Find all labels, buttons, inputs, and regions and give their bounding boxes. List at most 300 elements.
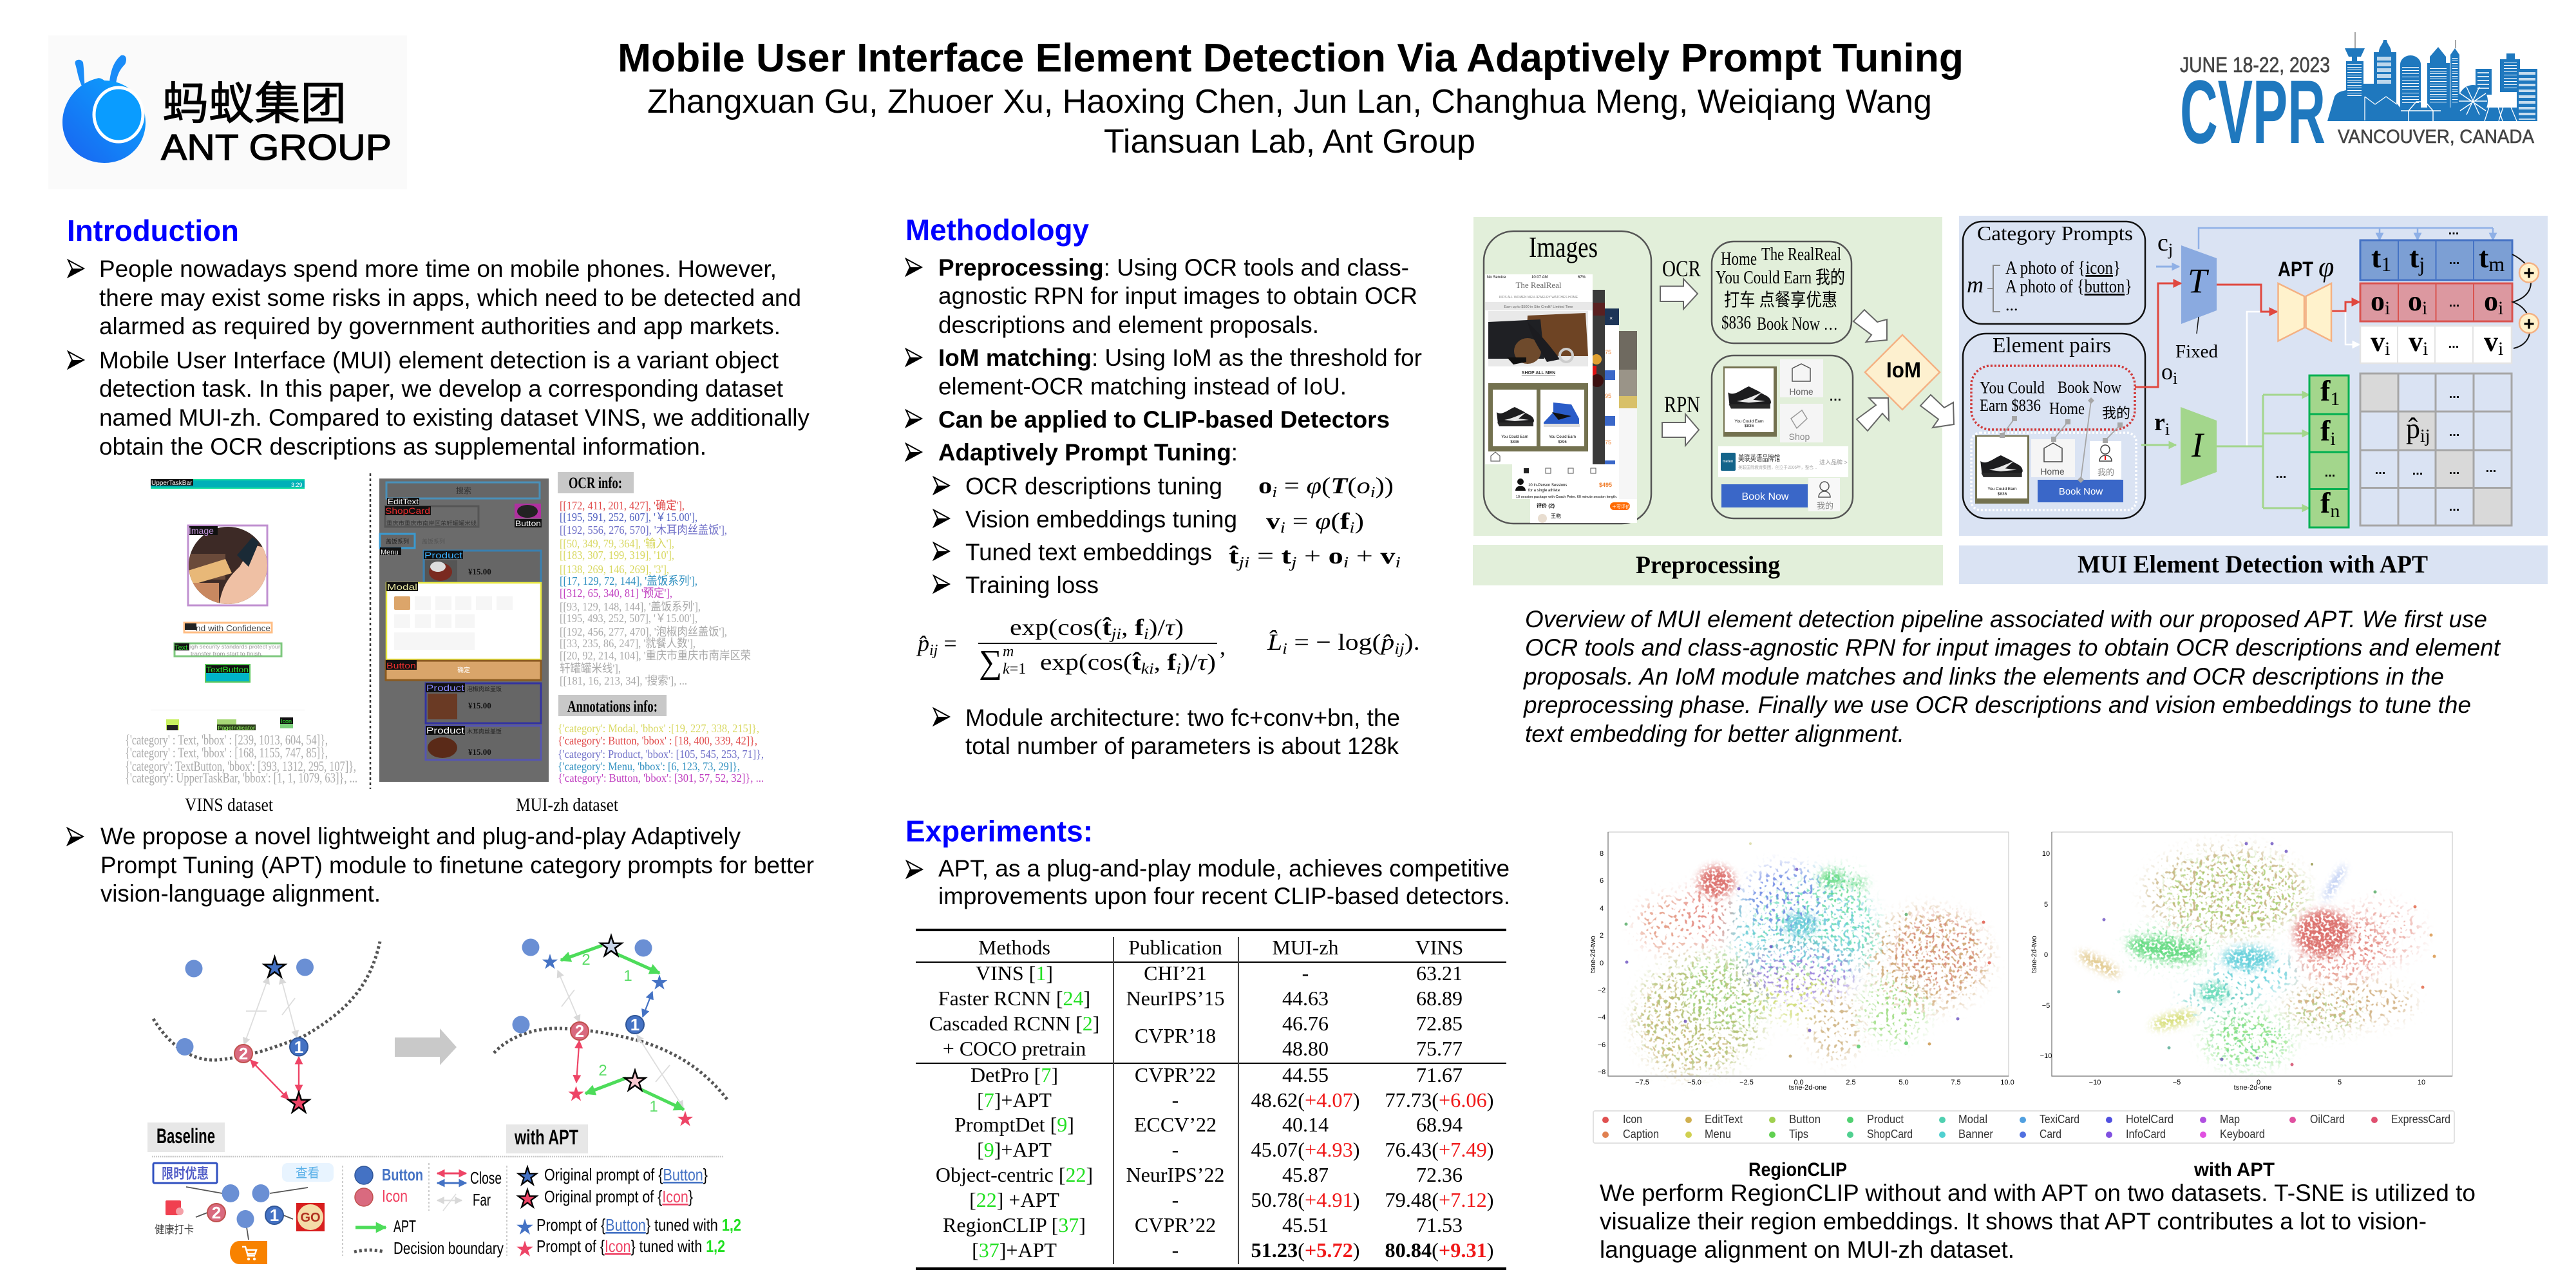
label: with APT: [506, 1124, 588, 1153]
arrow: OCR: OCR: [1662, 256, 1701, 281]
legend: t-SNE categories: InfoCard: [2126, 1128, 2166, 1141]
Annotations info list: {'category': Button, 'bbox': [301, 57, 52, 32]}, ...: [558, 772, 764, 784]
table header: Publication: [1128, 936, 1222, 959]
MUI-zh annotated screenshot: ¥15.00: [468, 701, 491, 710]
MUI-zh annotated screenshot: Button: [386, 661, 416, 670]
vision embedding table: v: [2409, 326, 2423, 357]
element pairs box: 我的: [2098, 468, 2114, 477]
formula: loss: ki: [1141, 661, 1154, 677]
formula: loss: [916, 614, 1420, 681]
text block: t-SNE explanation: [1600, 1180, 2476, 1263]
axis ticks: −2: [1598, 987, 1605, 994]
text block: t-SNE explanation: language alignment on MUI-zh dataset.: [1600, 1236, 2014, 1263]
images stack: 王艳: [1551, 513, 1561, 519]
chart: t-SNE RegionCLIP: [1589, 832, 2014, 1092]
text encoder T: T: [2188, 261, 2210, 300]
axis ticks: 10: [2418, 1079, 2425, 1086]
OCR info list: [[20, 92, 214, 104], '重庆市重庆市南岸区荣: [560, 649, 751, 662]
category prompts box: A photo of {icon}: [2005, 258, 2121, 278]
category prompts box: [1963, 222, 2145, 324]
axis ticks: −5: [2042, 1002, 2050, 1010]
text block: intro bullet 1: People nowadays spend more time on mobile phones. However,: [99, 256, 777, 282]
APT module: APT: [2278, 258, 2313, 281]
figure: with APT decision boundary: 2: [575, 1021, 584, 1041]
images stack: You Could Earn: [1549, 435, 1576, 439]
element pairs box: 我的: [2102, 405, 2130, 421]
region features column: [2309, 374, 2349, 527]
text block: intro bullet 2: [68, 347, 810, 460]
images stack: 75: [1605, 439, 1611, 446]
chart: t-SNE with APT: [2031, 832, 2452, 1092]
images stack: KIDS ALL WOMEN MEN JEWELRY WATCHES HOME: [1499, 296, 1578, 299]
row: VINS: 63.21: [1416, 961, 1463, 985]
legend: t-SNE categories: Modal: [1958, 1113, 1987, 1126]
vision embedding table: i: [2385, 338, 2390, 359]
sub bullet: tuned text embeddings: +: [1297, 543, 1329, 569]
formula: loss: ji: [1109, 626, 1121, 643]
formula: loss: τ): [1197, 649, 1215, 675]
row: Cascaded RCNN: [929, 1012, 1463, 1047]
sub bullet: module architecture: Module architecture: two fc+conv+bn, the: [965, 705, 1400, 731]
sub bullet: tuned text embeddings: Tuned text embeddings: [965, 539, 1212, 565]
row: Object-centric: NeurIPS’22: [1126, 1163, 1224, 1186]
axis ticks: tsne-2d-one: [1789, 1084, 1826, 1092]
text embedding table: 1: [2381, 252, 2391, 276]
row: COCO pretrain: 48.80: [1282, 1037, 1329, 1060]
example UI elements mapped to points: 2: [212, 1203, 221, 1222]
row: RegionCLIP: 71.53: [1416, 1213, 1463, 1236]
figure: with APT decision boundary: 1: [649, 1098, 658, 1115]
Annotations info list: {'category': Button, 'bbox' : [18, 400, 339, 42]},: [558, 734, 757, 747]
formula: loss: =: [938, 630, 957, 656]
legend: APT figure: Far: [473, 1190, 491, 1209]
images stack: ×: [1609, 315, 1613, 321]
legend: APT figure: Close: [470, 1168, 502, 1188]
row: PromptDet APT: -: [1172, 1138, 1179, 1161]
arrow: RPN: RPN: [1664, 392, 1700, 417]
Annotations info heading: [558, 695, 667, 716]
sub bullet: tuned text embeddings: t̂: [1229, 543, 1239, 569]
APT module: [2278, 251, 2334, 341]
sub bullet: vision tuning: φ(f: [1315, 508, 1348, 534]
axis ticks: 7.5: [1951, 1079, 1961, 1086]
row: VINS: [976, 961, 1463, 985]
OCR info heading: OCR info:: [569, 475, 622, 492]
axis ticks: −5.0: [1687, 1079, 1701, 1086]
row: RegionCLIP APT: -: [1172, 1238, 1179, 1262]
APT module: φ: [2318, 251, 2334, 283]
title block: Tiansuan Lab, Ant Group: [1104, 123, 1475, 160]
logo: CVPR 2023 Vancouver: CVPR: [2180, 61, 2325, 162]
MUI-zh annotated screenshot: Menu: [381, 549, 399, 556]
sub bullet: vision tuning: =: [1285, 508, 1315, 534]
row: DetPro: 44.55: [1282, 1063, 1329, 1086]
VINS screenshot with boxes: PageIndicator: [218, 725, 255, 731]
images stack: No Service: [1487, 276, 1506, 279]
row: PromptDet: PromptDet [9]: [954, 1113, 1074, 1136]
MUI-zh annotated screenshot: [379, 478, 549, 782]
axis ticks: 10.0: [2000, 1079, 2014, 1086]
RPN element proposals box: 进入品牌 >: [1819, 459, 1848, 466]
images stack: The RealReal: [1515, 280, 1562, 290]
row: Object-centric: [936, 1163, 1463, 1186]
OCR embedding table: ...: [2449, 296, 2459, 310]
row: PromptDet: 40.14: [1282, 1113, 1329, 1136]
images stack: 10:07 AM: [1531, 276, 1548, 279]
figure: with APT decision boundary: 1: [623, 967, 632, 985]
OCR info list: [[172, 411, 201, 427], '确定'],: [560, 499, 685, 512]
row: PromptDet: [954, 1113, 1463, 1136]
arrow: baseline to APT: [395, 1028, 457, 1065]
region features column: n: [2330, 500, 2340, 522]
text embedding table: m: [2488, 252, 2505, 276]
element pairs box: Book Now: [2059, 486, 2103, 497]
sub bullet: tuned text embeddings: i: [1343, 554, 1349, 571]
plus nodes: [2512, 254, 2539, 348]
formula: loss: ,: [1121, 614, 1135, 640]
VINS screenshot with boxes: transfer from start to finish.: [191, 651, 263, 657]
table header: VINS: [1416, 936, 1463, 959]
vision embedding table: i: [2498, 338, 2503, 359]
MUI-zh annotated screenshot: 搜索: [456, 486, 471, 495]
OCR embedding table: i: [2498, 298, 2503, 319]
probability matrix: ...: [2412, 464, 2423, 478]
axis ticks: 0: [2044, 951, 2048, 959]
row: VINS: VINS [1]: [976, 961, 1053, 985]
text block: intro bullet 3: vision-language alignment.: [100, 880, 381, 907]
sub bullet: tuned text embeddings: i: [1395, 554, 1401, 571]
label: Preprocessing: Preprocessing: [1636, 551, 1780, 579]
row: VINS: -: [1302, 961, 1309, 985]
input labels and arrows: i: [2173, 369, 2177, 388]
bullet: Preprocessing: agnostic RPN for input images to obtain OCR: [938, 283, 1417, 309]
title block: [618, 36, 1964, 160]
OCR info list: [[181, 16, 213, 34], '搜索'], ...: [560, 674, 687, 687]
OCR info list: [[195, 493, 252, 507], '￥15.00'],: [560, 612, 697, 625]
formula: loss: m: [1003, 643, 1014, 660]
probability matrix: ...: [2449, 425, 2459, 439]
images stack: 10 In-Person Sessions: [1528, 484, 1567, 488]
OCR info list: 轩罐罐米线'],: [560, 662, 621, 675]
panel: preprocessing pipeline: [1473, 217, 1954, 536]
bullet: Adaptively Prompt Tuning: Adaptively Prompt Tuning:: [938, 439, 1238, 466]
caption: MUI-zh dataset: MUI-zh dataset: [516, 795, 618, 815]
axis ticks: −5: [2173, 1079, 2181, 1086]
element pairs box: Home: [2040, 466, 2065, 477]
legend: t-SNE categories: HotelCard: [2126, 1113, 2174, 1126]
formula: loss: ij: [929, 642, 938, 659]
Annotations info list: [558, 722, 764, 784]
region features column: 1: [2330, 388, 2340, 410]
OCR info list: [[50, 349, 79, 364], '输入'],: [560, 537, 674, 550]
images stack: You Could Earn: [1501, 435, 1528, 439]
vision embedding table: v: [2371, 326, 2385, 357]
sub bullet: tuned text embeddings: v: [1380, 543, 1395, 569]
row: RegionCLIP: RegionCLIP [37]: [943, 1213, 1086, 1236]
element pairs box: Element pairs: [1993, 334, 2111, 357]
images stack: 评价 (2): [1537, 502, 1555, 509]
bullet: APT plug-and-play: APT, as a plug-and-play module, achieves competitive: [938, 855, 1510, 882]
figure: baseline decision boundary: 2: [239, 1044, 248, 1063]
probability matrix: ...: [2449, 463, 2459, 477]
images stack: 75: [1605, 349, 1611, 355]
Annotations info list: {'category': Menu, 'bbox': [6, 123, 73, 29]},: [558, 760, 740, 773]
row: RegionCLIP: [943, 1213, 1463, 1236]
probability matrix: ...: [2375, 463, 2385, 477]
row: Faster RCNN: [938, 987, 1463, 1010]
pipeline caption: [1523, 606, 2501, 747]
example UI elements mapped to points: 限时优惠: [162, 1166, 209, 1182]
formula: loss: = − log(: [1287, 629, 1381, 655]
axis ticks: −4: [1598, 1014, 1605, 1021]
arrow: OCR to IoM: [1853, 310, 1887, 342]
formula: loss: ∑: [979, 644, 1002, 681]
axis ticks: 10: [2042, 850, 2050, 858]
row: Object-centric APT: -: [1172, 1188, 1179, 1211]
label: Baseline: [147, 1122, 225, 1152]
axis ticks: [1589, 850, 2014, 1092]
region features column: i: [2330, 428, 2336, 450]
figure: with APT decision boundary: 1: [630, 1015, 639, 1034]
input labels and arrows: c: [2157, 229, 2168, 256]
vision embedding table: [2360, 326, 2512, 363]
images stack: for a single athlete: [1528, 489, 1560, 493]
sub bullet: tuned text embeddings: t: [1282, 543, 1291, 569]
label: MUI Element Detection with APT: MUI Element Detection with APT: [2078, 551, 2428, 578]
row: COCO pretrain: [943, 1037, 1463, 1060]
MUI-zh annotated screenshot: 盖饭系列: [422, 538, 445, 545]
input labels and arrows: r: [2154, 409, 2165, 436]
sub bullet: tuned text embeddings: ji: [1236, 554, 1249, 571]
pipeline caption: preprocessing phase. Finally we use OCR descriptions and vision embeddings to tune the: [1523, 692, 2471, 718]
MUI-zh annotated screenshot: EditText: [388, 497, 419, 506]
Annotations info list: {'category': Product, 'bbox': [105, 545, 253, 71]},: [558, 748, 764, 761]
sub bullet: tuned text embeddings: o: [1329, 543, 1343, 569]
logo: Ant Group: 蚂蚁集团: [162, 79, 346, 129]
element pairs box: Home: [2049, 399, 2085, 418]
label: MUI Element Detection with APT: [1959, 545, 2548, 584]
row: RegionCLIP APT: 80.84(+9.31): [1385, 1238, 1494, 1262]
element pairs box: Book Now: [2058, 378, 2121, 397]
legend: t-SNE categories: Caption: [1623, 1128, 1659, 1141]
panel: experiments: [905, 814, 1510, 1270]
legend: t-SNE categories: ExpressCard: [2391, 1113, 2450, 1126]
sub bullet: vision tuning: Vision embeddings tuning: [965, 506, 1237, 533]
legend: APT figure: Button: [382, 1165, 423, 1184]
images stack: ＋写评价: [1612, 504, 1630, 509]
row: PromptDet: ECCV’22: [1134, 1113, 1217, 1136]
heading: Introduction: Introduction: [67, 214, 239, 247]
probability matrix: [2360, 374, 2512, 526]
row: Faster RCNN: Faster RCNN [24]: [938, 987, 1090, 1010]
VINS screenshot with boxes: Icon: [281, 718, 292, 724]
OCR info list: [560, 499, 751, 687]
element pairs box: [1963, 334, 2145, 518]
row: DetPro: [971, 1063, 1463, 1086]
formula: loss: ,: [1220, 634, 1226, 659]
VINS screenshot with boxes: Image: [189, 526, 214, 536]
OCR embedding table: o: [2484, 285, 2498, 317]
row: Object-centric APT: 50.78(+4.91): [1251, 1188, 1360, 1211]
sub bullet: module architecture: total number of parameters is about 128k: [965, 733, 1399, 759]
OCR results box: You Could Earn 我的: [1716, 267, 1845, 288]
RPN element proposals box: Home: [1789, 386, 1814, 397]
MUI-zh annotated screenshot: 确定: [457, 666, 470, 674]
text block: intro bullet 3: We propose a novel lightweight and plug-and-play Adaptively: [100, 823, 741, 849]
row: RegionCLIP APT: 51.23(+5.72): [1251, 1238, 1360, 1262]
formula: loss: ,: [1154, 649, 1167, 675]
example UI elements mapped to points: [153, 1163, 334, 1264]
images stack: 10 session package with Coach Peter. 60 minute session length.: [1516, 495, 1618, 499]
images stack: [1484, 231, 1651, 524]
axis ticks: [2031, 850, 2425, 1092]
category prompts box: ...: [2005, 296, 2018, 314]
OCR embedding table: i: [2385, 298, 2390, 319]
input labels and arrows: o: [2161, 359, 2173, 384]
region features column: ...: [2325, 466, 2335, 480]
VINS annotation text: {'category' : Text, 'bbox' : [239, 1013, 604, 54]},: [125, 732, 328, 748]
VINS annotation text: {'category': UpperTaskBar, 'bbox': [1, 1, 1079, 63]}, ...: [125, 770, 357, 786]
formula: loss: i: [1282, 641, 1287, 658]
figure: baseline decision boundary: [153, 942, 380, 1112]
probability matrix: p̂: [2406, 413, 2420, 444]
row: DetPro: 71.67: [1416, 1063, 1463, 1086]
bullet: Preprocessing: [906, 254, 1417, 338]
sub bullet: OCR tuning: i: [1272, 484, 1277, 501]
OCR info heading: [558, 472, 634, 493]
OCR info list: [[33, 235, 86, 247], '就餐人数'],: [560, 637, 696, 650]
OCR results box: The RealReal: [1761, 245, 1841, 265]
row: Object-centric: 45.87: [1282, 1163, 1329, 1186]
category prompts box: Category Prompts: [1977, 222, 2133, 245]
IoM diamond: IoM: [1886, 358, 1921, 383]
legend: t-SNE categories: TexiCard: [2040, 1113, 2079, 1126]
logo: Ant Group: ANT GROUP: [161, 127, 392, 168]
images stack: $836: [1510, 440, 1519, 444]
table header: MUI-zh: [1272, 936, 1339, 959]
VINS annotation text: [125, 732, 357, 786]
legend: APT figure: Icon: [382, 1186, 408, 1206]
text encoder T: Fixed: [2175, 342, 2218, 362]
text encoder T: [2175, 245, 2218, 362]
VINS screenshot with boxes: UpperTaskBar: [151, 480, 193, 487]
axis ticks: −6: [1598, 1041, 1605, 1049]
images stack: 67%: [1578, 276, 1586, 279]
formula: loss: p̂: [1379, 629, 1394, 655]
legend: APT figure: Prompt of {Icon} tuned with 1,2: [536, 1236, 725, 1256]
text embedding table: t: [2479, 241, 2488, 274]
figure: with APT decision boundary: [494, 936, 727, 1126]
formula: loss: f: [1135, 614, 1144, 640]
legend: t-SNE categories: OilCard: [2310, 1113, 2345, 1126]
figure: with APT decision boundary: 2: [582, 951, 591, 969]
row: PromptDet APT: 45.07(+4.93): [1251, 1138, 1360, 1161]
row: Object-centric APT: [22] +APT: [969, 1188, 1059, 1211]
formula: loss: p̂: [916, 630, 929, 656]
VINS screenshot with boxes: igh security standards protect your: [190, 644, 280, 650]
heading: Experiments: Experiments:: [905, 814, 1093, 848]
heading: Methodology: Methodology: [905, 213, 1089, 247]
OCR info list: [[138, 269, 146, 269], '3'],: [560, 563, 669, 576]
pipeline caption: OCR tools and class-agnostic RPN for input images to obtain OCR descriptions and element: [1525, 634, 2501, 661]
VINS screenshot with boxes: 3:29: [291, 482, 303, 488]
formula: loss: ).: [1405, 629, 1420, 655]
logo: CVPR 2023 Vancouver: [2180, 32, 2537, 162]
row: Cascaded RCNN: Cascaded RCNN [2]: [929, 1012, 1099, 1035]
images stack: $396: [1558, 440, 1567, 444]
row: RegionCLIP: CVPR’22: [1135, 1213, 1216, 1236]
VINS annotation text: {'category': TextButton, 'bbox': [393, 1312, 295, 107]},: [125, 758, 356, 774]
row: DetPro APT: [7]+APT: [977, 1088, 1052, 1112]
row: DetPro APT: 77.73(+6.06): [1385, 1088, 1494, 1112]
sub bullet: OCR tuning: )): [1376, 473, 1394, 498]
MUI-zh annotated screenshot: ¥15.00: [468, 747, 491, 757]
category prompts box: m: [1967, 272, 1984, 298]
pipeline caption: Overview of MUI element detection pipeline associated with our proposed APT. We first use: [1525, 606, 2487, 632]
text embedding table: t: [2409, 241, 2419, 274]
OCR info list: [[192, 556, 276, 570], '木耳肉丝盖饭'],: [560, 524, 727, 536]
logo: CVPR 2023 Vancouver: JUNE 18-22, 2023: [2180, 53, 2330, 77]
text block: intro bullet 2: obtain the OCR descriptions as supplemental information.: [99, 433, 706, 460]
OCR results box: [1712, 242, 1852, 343]
element pairs box: Earn $836: [1980, 396, 2041, 415]
formula: loss: )/: [1181, 649, 1197, 675]
sub bullet: OCR tuning: o: [1258, 473, 1272, 498]
panel: MUI element detection with APT: [1959, 216, 2548, 536]
row: DetPro APT: [977, 1088, 1494, 1112]
OCR results box: 打车 点餐享优惠: [1724, 290, 1837, 310]
axis ticks: 8: [1600, 850, 1604, 858]
figure: VINS dataset example: [125, 479, 357, 815]
legend: t-SNE categories: Card: [2040, 1128, 2061, 1141]
text block: intro bullet 3: Prompt Tuning (APT) module to finetune category prompts for better: [100, 852, 814, 878]
legend: t-SNE categories: ShopCard: [1867, 1128, 1913, 1141]
legend: APT figure: Original prompt of {Icon}: [544, 1187, 693, 1206]
sub bullet: vision tuning: i: [1349, 520, 1354, 536]
axis ticks: 0.0: [1794, 1079, 1804, 1086]
bullet: IoM matching: IoM matching: Using IoM as the threshold for: [938, 345, 1422, 371]
OCR embedding table: o: [2371, 285, 2385, 317]
MUI-zh annotated screenshot: ¥15.00: [468, 567, 491, 576]
OCR info list: [[93, 129, 148, 144], '盖饭系列'],: [560, 600, 701, 613]
VINS screenshot with boxes: TextButton: [206, 665, 249, 674]
arrow: RPN to IoM: [1857, 398, 1889, 431]
row: RegionCLIP APT: [972, 1238, 1494, 1262]
OCR embedding table: i: [2422, 298, 2427, 319]
images stack: Earn up to $500 in Site Credit* Limited Time: [1504, 305, 1573, 309]
row: Object-centric APT: [969, 1188, 1494, 1211]
axis ticks: −7.5: [1635, 1079, 1649, 1086]
table header: Methods: [978, 936, 1050, 959]
category prompts box: A photo of {button}: [2005, 277, 2132, 297]
OCR info list: [[195, 591, 252, 607], '￥15.00'],: [560, 511, 697, 524]
logo: CVPR 2023 Vancouver: VANCOUVER, CANADA: [2338, 126, 2534, 147]
caption: with APT: with APT: [2193, 1159, 2275, 1180]
text embedding table: t: [2371, 241, 2381, 274]
row: Object-centric APT: 79.48(+7.12): [1385, 1188, 1494, 1211]
text block: intro bullet 1: [68, 256, 801, 339]
MUI-zh annotated screenshot: 盖饭系列: [386, 538, 409, 545]
caption: RegionCLIP: RegionCLIP: [1748, 1159, 1847, 1180]
MUI-zh annotated screenshot: Product: [426, 683, 464, 693]
pipeline caption: proposals. An IoM module matches and links the elements and OCR descriptions in the: [1523, 663, 2444, 690]
row: Faster RCNN: 44.63: [1282, 987, 1329, 1010]
text embedding table: j: [2418, 252, 2425, 276]
row: Faster RCNN: NeurIPS’15: [1126, 987, 1224, 1010]
formula: loss: k=1: [1003, 661, 1026, 677]
sub bullet: OCR tuning: i: [1370, 484, 1376, 501]
row: COCO pretrain: + COCO pretrain: [943, 1037, 1086, 1060]
